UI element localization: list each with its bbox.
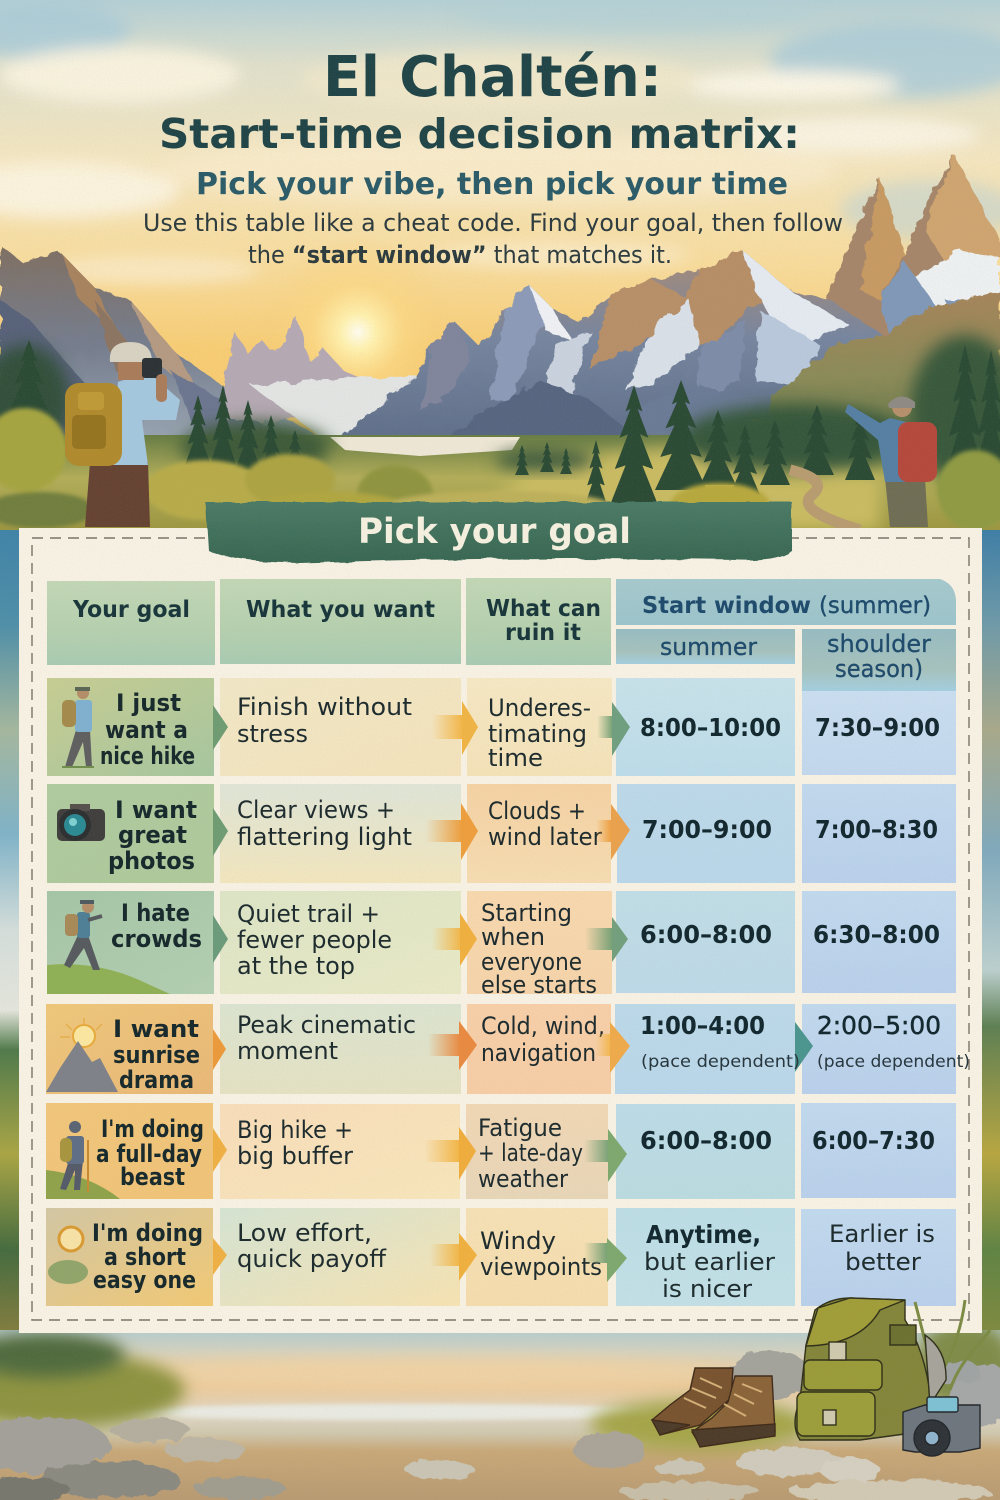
right hiker pointing <box>845 396 937 527</box>
row 3: hate crowds: everyone <box>481 948 582 976</box>
header: start window <box>616 579 956 625</box>
row 4: sunrise drama: sunrise <box>113 1041 200 1069</box>
row 2: great photos: 7:00–9:00 <box>642 815 772 844</box>
row 2: great photos: photos <box>108 847 195 875</box>
mountains: far left range <box>0 245 430 445</box>
row 6: short easy one: Windy <box>480 1227 556 1255</box>
background: painted landscape <box>0 0 1000 530</box>
row 6: short easy one: Earlier is <box>829 1220 935 1248</box>
row 2: great photos: I want <box>115 796 197 824</box>
row 3: hate crowds: else starts <box>481 971 597 999</box>
trail <box>790 470 860 530</box>
row 4: sunrise drama: 2:00–5:00 <box>817 1011 941 1040</box>
arrow: summer to shoulder <box>795 1022 813 1072</box>
row 1: nice hike: stress <box>237 720 308 748</box>
header: what can ruin it: What can <box>486 596 601 622</box>
row 5: full-day beast: 6:00–8:00 <box>640 1126 772 1155</box>
row 1: nice hike <box>47 678 956 776</box>
row 5: full-day beast: I'm doing <box>101 1115 204 1143</box>
row 5: full-day beast: Fatigue <box>478 1114 562 1142</box>
panel: paper card <box>19 528 982 1333</box>
row 3: hate crowds <box>47 891 956 999</box>
row 2: great photos: Clouds + <box>488 797 586 825</box>
row 1: nice hike: want a <box>105 716 188 744</box>
ribbon: Pick your goal: Pick your goal <box>358 512 631 552</box>
row 6: short easy one: Anytime, <box>646 1220 761 1249</box>
side strip right <box>981 530 1000 1330</box>
row 6: short easy one: a short <box>104 1243 186 1271</box>
row 1: nice hike: 8:00–10:00 <box>640 713 781 742</box>
mountains: right foothill <box>770 290 1000 480</box>
row 3: hate crowds: when <box>481 923 545 951</box>
header: shoulder season <box>802 629 956 691</box>
row 6: short easy one: easy one <box>93 1266 196 1294</box>
gear: camera <box>903 1397 980 1456</box>
icon: little sun and shrub <box>48 1227 88 1284</box>
header: shoulder season: season) <box>835 655 923 683</box>
title block: Use this table like a cheat code. Find your goal, then follow <box>143 209 843 237</box>
arrows: want to ruin <box>424 701 478 1281</box>
title block: Pick your vibe, then pick your time <box>196 167 788 202</box>
sun <box>263 237 453 427</box>
header: your goal <box>47 581 215 665</box>
header: shoulder season: shoulder <box>827 630 931 658</box>
row 4: sunrise drama: I want <box>113 1015 199 1043</box>
row 4: sunrise drama: Cold, wind, <box>481 1012 605 1040</box>
header: what can ruin it <box>466 578 611 665</box>
icon: hiker with trekking pole <box>60 1121 88 1192</box>
header: what can ruin it: ruin it <box>505 620 581 646</box>
row 6: short easy one: but earlier <box>644 1248 775 1276</box>
row 4: sunrise drama: (pace dependent) <box>641 1052 800 1072</box>
row 4: sunrise drama: navigation <box>481 1039 596 1067</box>
row 4: sunrise drama: (pace dependent) <box>817 1052 970 1072</box>
row 5: full-day beast: a full-day <box>96 1140 202 1168</box>
row 6: short easy one: is nicer <box>662 1275 752 1303</box>
row 3: hate crowds: 6:00–8:00 <box>640 920 772 949</box>
row 5: full-day beast: + late-day <box>478 1139 583 1167</box>
row 4: sunrise drama: Peak cinematic <box>237 1011 416 1039</box>
header: start window: Start window <box>642 593 811 619</box>
title block: El Chaltén: <box>323 45 662 110</box>
gear: backpack <box>795 1298 946 1440</box>
row 5: full-day beast: 6:00–7:30 <box>812 1126 935 1155</box>
side strip left <box>0 530 20 1330</box>
row 5: full-day beast: big buffer <box>237 1142 353 1170</box>
row 3: hate crowds: crowds <box>111 925 202 953</box>
clouds <box>0 0 1000 284</box>
row 5: full-day beast: weather <box>478 1165 568 1193</box>
row 1: nice hike: Underes- <box>488 694 591 722</box>
row 4: sunrise drama <box>46 1004 970 1094</box>
header: summer <box>616 629 795 664</box>
dashed stitching <box>32 538 969 1320</box>
row 4: sunrise drama: 1:00–4:00 <box>640 1011 765 1040</box>
row 3: hate crowds: Quiet trail + <box>237 900 380 928</box>
header: start window: (summer) <box>819 593 931 619</box>
forest <box>0 335 1000 505</box>
mountains: Fitz Roy peaks <box>825 155 1000 340</box>
row 6: short easy one: viewpoints <box>480 1253 602 1281</box>
arrows: ruin to start window <box>584 702 630 1282</box>
row 6: short easy one: I'm doing <box>92 1219 203 1247</box>
header: what you want: What you want <box>246 597 435 623</box>
row 1: nice hike: time <box>488 744 543 772</box>
row 1: nice hike: timating <box>488 720 587 748</box>
title block: Start-time decision matrix: <box>159 110 800 158</box>
icon: sun over mountain <box>46 1018 118 1092</box>
row 1: nice hike: nice hike <box>100 742 195 770</box>
row 4: sunrise drama: moment <box>237 1037 338 1065</box>
row 6: short easy one: better <box>845 1248 921 1276</box>
meadow <box>0 435 1000 530</box>
icon: hiker standing <box>62 687 94 768</box>
header: what you want <box>220 579 461 664</box>
mountains: central snowy range <box>335 250 890 445</box>
row 2: great photos <box>47 784 956 883</box>
icon: camera <box>57 804 105 841</box>
arrows: goal to want <box>213 705 228 1275</box>
header: your goal: Your goal <box>72 597 190 623</box>
table header <box>47 578 956 691</box>
row 1: nice hike: Finish without <box>237 693 412 721</box>
row 5: full-day beast: Big hike + <box>237 1116 353 1144</box>
icon: hiker walking <box>64 900 102 970</box>
row 2: great photos: wind later <box>488 823 602 851</box>
row 6: short easy one: Low effort, <box>237 1219 372 1247</box>
ribbon: Pick your goal <box>205 502 792 563</box>
row 2: great photos: flattering light <box>237 823 412 851</box>
gear: plant behind backpack <box>915 1300 990 1400</box>
header: summer: summer <box>660 633 757 661</box>
row 1: nice hike: I just <box>116 689 181 717</box>
row 2: great photos: great <box>118 821 187 849</box>
row 2: great photos: Clear views + <box>237 796 395 824</box>
title block: the “start window” that matches it. <box>248 241 672 269</box>
row 5: full-day beast: beast <box>120 1163 185 1191</box>
bushes <box>0 408 1000 530</box>
row 3: hate crowds: Starting <box>481 899 572 927</box>
row 2: great photos: 7:00–8:30 <box>815 815 938 844</box>
row 3: hate crowds: I hate <box>121 899 190 927</box>
gear: hiking boots <box>652 1368 775 1447</box>
bottom river and ground <box>0 1320 1000 1500</box>
row 5: full-day beast <box>46 1103 956 1199</box>
row 6: short easy one: quick payoff <box>237 1245 386 1273</box>
row 3: hate crowds: fewer people <box>237 926 392 954</box>
row 3: hate crowds: at the top <box>237 952 355 980</box>
row 6: short easy one <box>46 1208 956 1306</box>
title block <box>143 45 843 269</box>
row 3: hate crowds: 6:30–8:00 <box>813 920 940 949</box>
row 1: nice hike: 7:30–9:00 <box>815 713 940 742</box>
left hiker with binoculars <box>65 342 180 527</box>
row 4: sunrise drama: drama <box>119 1066 194 1094</box>
